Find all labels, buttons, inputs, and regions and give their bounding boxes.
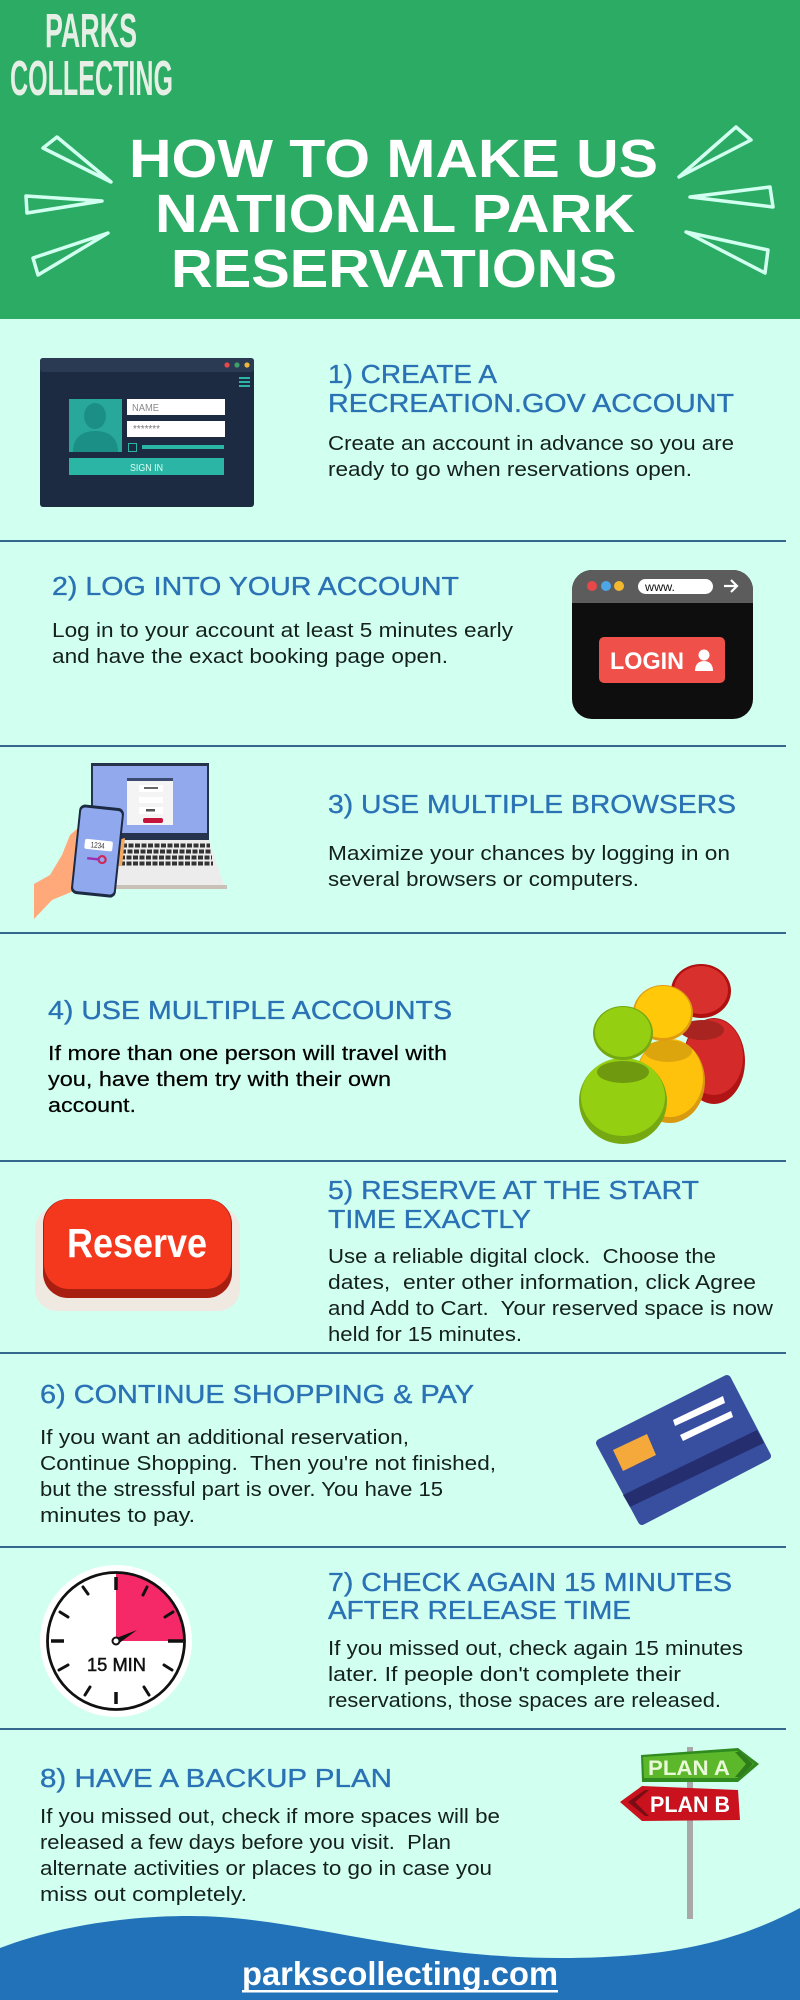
heading: step 1: RECREATION.GOV ACCOUNT <box>328 388 734 418</box>
text: step 6: minutes to pay. <box>40 1505 195 1527</box>
title <box>129 129 658 299</box>
title: NATIONAL PARK <box>155 184 635 244</box>
title: RESERVATIONS <box>171 239 617 299</box>
text: step 5: Use a reliable digital clock. Choose the <box>328 1246 716 1268</box>
text: step 7: reservations, those spaces are released. <box>328 1690 721 1712</box>
panel: blue footer wave <box>0 1908 800 2000</box>
text: step 6: but the stressful part is over. You have 15 <box>40 1479 443 1501</box>
heading: step 7: AFTER RELEASE TIME <box>328 1595 631 1625</box>
icon: plan A and plan B signpost: PLAN A <box>648 1757 730 1780</box>
heading: step 5 <box>328 1175 699 1234</box>
text: step 8: miss out completely. <box>40 1884 247 1906</box>
text: step 6 <box>40 1427 496 1527</box>
panel: step 5 reserve on time <box>35 1175 774 1346</box>
icon: left burst rays <box>26 137 111 275</box>
heading: step 1: 1) CREATE A <box>328 359 498 389</box>
text: step 3: several browsers or computers. <box>328 869 639 891</box>
icon: reserve button <box>35 1199 240 1311</box>
panel: green header <box>0 0 800 319</box>
panel: step 6 continue shopping and pay <box>40 1379 767 1527</box>
text: step 8: alternate activities or places to go in case you <box>40 1858 492 1880</box>
text: step 4 <box>48 1043 447 1117</box>
title: HOW TO MAKE US <box>129 129 658 189</box>
icon: laptop and phone <box>34 763 227 919</box>
text: step 2 <box>52 620 513 668</box>
heading: step 4: 4) USE MULTIPLE ACCOUNTS <box>48 995 452 1025</box>
logo: Parks Collecting: COLLECTING <box>10 52 173 106</box>
text: step 8: released a few days before you visit. Plan <box>40 1832 451 1854</box>
text: step 1: Create an account in advance so you are <box>328 433 734 455</box>
text: step 7: later. If people don't complete their <box>328 1664 681 1686</box>
icon: credit card <box>600 1379 767 1521</box>
icon: sign-in window: NAME <box>132 403 159 414</box>
text: step 5 <box>328 1246 774 1346</box>
logo: Parks Collecting <box>10 5 173 106</box>
logo: Parks Collecting: PARKS <box>45 5 137 58</box>
icon: sign-in window: SIGN IN <box>130 463 163 474</box>
footer link text: parkscollecting.com <box>242 1955 558 1992</box>
icon: three coloured people <box>579 964 745 1144</box>
heading: step 5: TIME EXACTLY <box>328 1204 531 1234</box>
icon: 15 minute clock <box>40 1565 192 1717</box>
text: step 2: and have the exact booking page open. <box>52 646 448 668</box>
text: step 4: account. <box>48 1095 136 1117</box>
text: step 3: Maximize your chances by logging in on <box>328 843 730 865</box>
panel: step 2 log in <box>52 570 753 719</box>
icon: login browser window: www. <box>644 580 675 594</box>
text: step 7: If you missed out, check again 15 minutes <box>328 1638 743 1660</box>
panel: step 1 create account <box>40 358 734 507</box>
text: step 5: and Add to Cart. Your reserved space is now <box>328 1298 774 1320</box>
heading: step 5: 5) RESERVE AT THE START <box>328 1175 699 1205</box>
icon: login browser window: LOGIN <box>610 648 684 675</box>
icon: plan A and plan B signpost: PLAN B <box>650 1792 730 1817</box>
icon: sign-in window: ******* <box>133 424 160 435</box>
heading: step 7 <box>328 1567 732 1625</box>
panel: step 3 multiple browsers <box>34 763 736 919</box>
text: step 5: dates, enter other information, click Agree <box>328 1272 756 1294</box>
text: step 8 <box>40 1806 500 1906</box>
panel: step 7 check again <box>40 1565 743 1717</box>
heading: step 8: 8) HAVE A BACKUP PLAN <box>40 1763 392 1793</box>
text: step 4: you, have them try with their own <box>48 1069 391 1091</box>
text: step 8: If you missed out, check if more spaces will be <box>40 1806 500 1828</box>
icon: laptop and phone: 1234 <box>90 840 105 851</box>
icon: plan A and plan B signpost <box>620 1747 759 1919</box>
icon: login browser window <box>572 570 753 719</box>
heading: step 2: 2) LOG INTO YOUR ACCOUNT <box>52 571 459 601</box>
text: step 3 <box>328 843 730 891</box>
text: step 5: held for 15 minutes. <box>328 1324 522 1346</box>
heading: step 7: 7) CHECK AGAIN 15 MINUTES <box>328 1567 732 1597</box>
text: step 1: ready to go when reservations open. <box>328 459 692 481</box>
text: step 6: If you want an additional reservation, <box>40 1427 409 1449</box>
icon: 15 minute clock: 15 MIN <box>87 1655 146 1675</box>
text: step 7 <box>328 1638 743 1712</box>
icon: sign-in window <box>40 358 254 507</box>
text: step 2: Log in to your account at least 5 minutes early <box>52 620 513 642</box>
heading: step 3: 3) USE MULTIPLE BROWSERS <box>328 789 736 819</box>
text: step 1 <box>328 433 734 481</box>
panel: step 8 backup plan <box>40 1747 759 1919</box>
text: step 4: If more than one person will travel with <box>48 1043 447 1065</box>
text: step 6: Continue Shopping. Then you're not finished, <box>40 1453 496 1475</box>
heading: step 1 <box>328 359 734 418</box>
panel: step 4 multiple accounts <box>48 964 745 1144</box>
icon: reserve button: Reserve <box>67 1220 207 1266</box>
heading: step 6: 6) CONTINUE SHOPPING & PAY <box>40 1379 474 1409</box>
icon: right burst rays <box>679 127 773 273</box>
